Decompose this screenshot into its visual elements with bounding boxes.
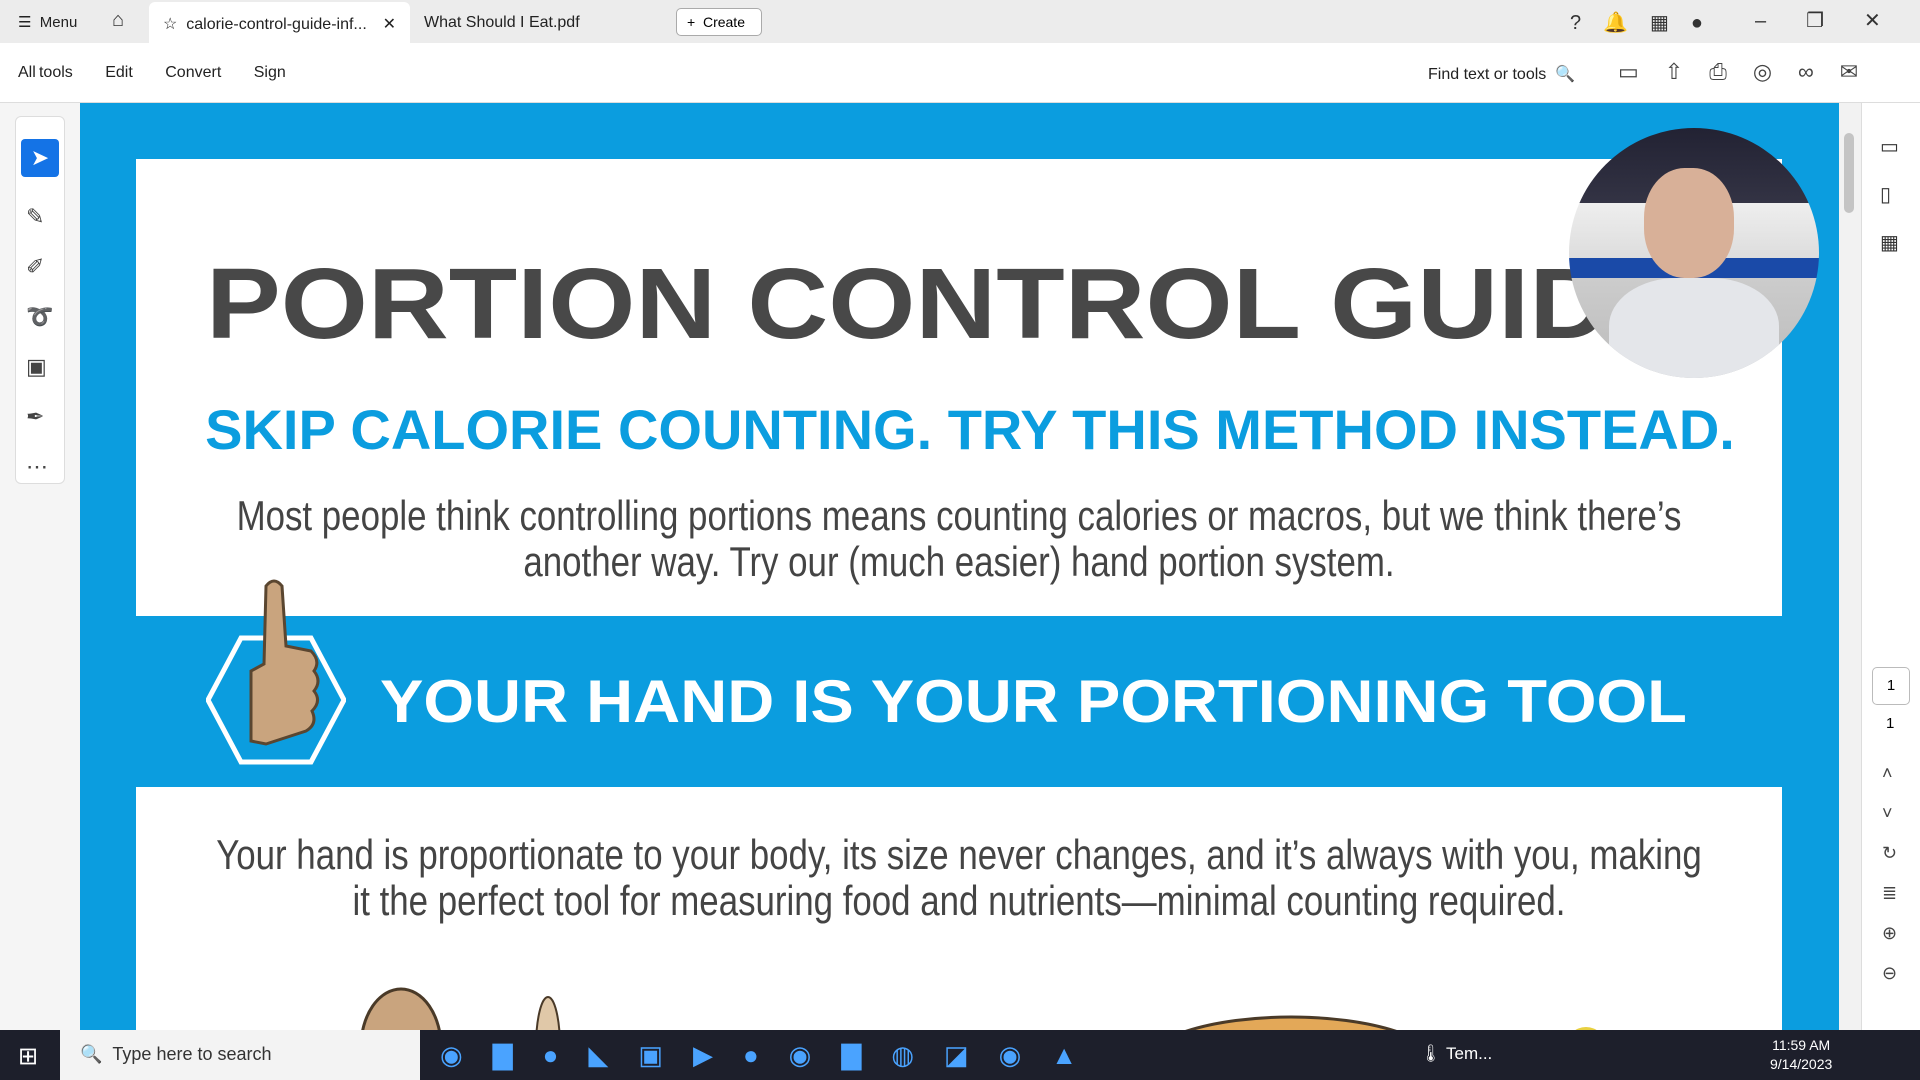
panel: hand explanation card xyxy=(136,787,1782,1047)
explanation text: it the perfect tool for measuring food and nutrients—minimal counting required. xyxy=(352,877,1565,924)
intro paragraph xyxy=(237,492,1681,585)
active tab: ☆ calorie-control-guide-inf... xyxy=(163,16,367,33)
create button xyxy=(676,8,762,36)
hand illustrations xyxy=(361,988,1596,1030)
page number xyxy=(1872,667,1910,705)
active tab xyxy=(149,2,410,43)
page number: 1 xyxy=(1887,677,1895,694)
right panel: ▦ xyxy=(1880,232,1899,254)
icon: thumbs up hexagon xyxy=(206,580,346,764)
home icon: ⌂ xyxy=(112,9,124,31)
search box: 🔍 Type here to search xyxy=(80,1044,272,1064)
panel: intro card xyxy=(136,159,1782,616)
tool panel: ⋯ xyxy=(26,454,48,479)
right panel: ≣ xyxy=(1882,883,1897,903)
tool panel: ✐ xyxy=(26,254,44,279)
explanation text xyxy=(216,831,1702,924)
right panel: ⊕ xyxy=(1882,923,1897,943)
subtitle: SKIP CALORIE COUNTING. TRY THIS METHOD INSTEAD. xyxy=(205,398,1735,461)
taskbar: ◉▇●◣▣▶●◉▇◍◪◉▲ xyxy=(440,1040,1107,1070)
tool panel: ➰ xyxy=(26,304,53,329)
right panel: ˅ xyxy=(1882,803,1893,823)
taskbar: ⊞ xyxy=(18,1043,38,1070)
scrollbar xyxy=(1839,103,1861,1030)
tool panel: ✒ xyxy=(26,404,44,429)
taskbar: 9/14/2023 xyxy=(1770,1056,1832,1072)
menu: ☰ Menu xyxy=(18,14,77,31)
intro paragraph: another way. Try our (much easier) hand portion system. xyxy=(523,538,1395,585)
main blue area xyxy=(80,103,1839,1030)
create button: + Create xyxy=(687,14,745,30)
toolbar: Find text or tools 🔍 xyxy=(1428,66,1575,83)
right panel: ▯ xyxy=(1880,184,1891,206)
window controls: ?🔔▦● xyxy=(1570,12,1725,34)
taskbar: 🌡 Tem... xyxy=(1420,1044,1492,1063)
toolbar: All tools Edit Convert Sign xyxy=(18,64,286,81)
tab bar: –❐✕ xyxy=(1755,10,1920,32)
taskbar xyxy=(0,1030,1920,1080)
tool panel: ✎ xyxy=(26,204,44,229)
toolbar xyxy=(0,43,1920,103)
webcam overlay xyxy=(1569,128,1819,378)
explanation text: Your hand is proportionate to your body, its size never changes, and it’s always with you, making xyxy=(216,831,1702,878)
tool panel xyxy=(15,116,65,484)
second tab: What Should I Eat.pdf xyxy=(424,14,580,31)
title: PORTION CONTROL GUIDE xyxy=(206,248,1685,360)
toolbar: ▭⇧⎙◎∞✉ xyxy=(1618,59,1884,84)
right panel: ⊖ xyxy=(1882,963,1897,983)
right panel xyxy=(1861,103,1920,1030)
tool panel: ➤ xyxy=(31,145,49,170)
right panel: ▭ xyxy=(1880,136,1899,158)
tool panel: ▣ xyxy=(26,354,47,379)
taskbar: 11:59 AM xyxy=(1772,1037,1830,1053)
active tab: ✕ xyxy=(383,16,396,33)
right panel: ↻ xyxy=(1882,843,1897,863)
tab bar xyxy=(0,0,1920,43)
search box xyxy=(60,1030,420,1080)
right panel: ˄ xyxy=(1882,763,1893,783)
left sidebar xyxy=(0,103,80,1030)
intro paragraph: Most people think controlling portions means counting calories or macros, but we think there’s xyxy=(237,492,1681,539)
band heading: YOUR HAND IS YOUR PORTIONING TOOL xyxy=(380,668,1687,735)
right panel: 1 xyxy=(1886,715,1894,732)
